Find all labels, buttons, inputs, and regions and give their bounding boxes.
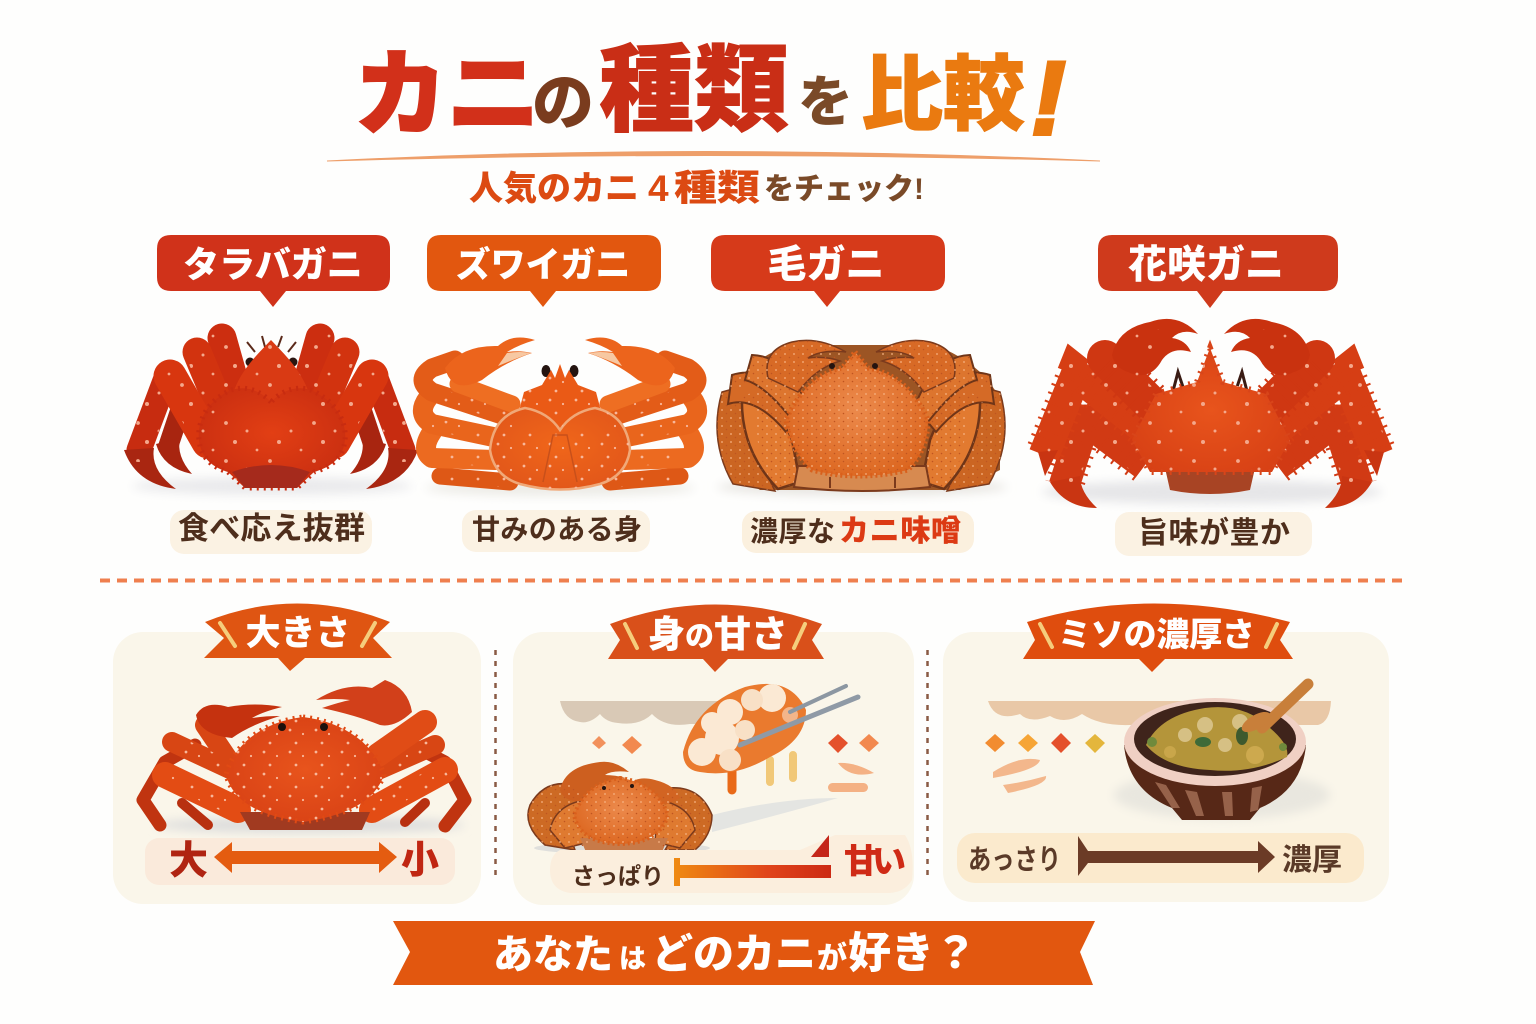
scale: 大 to 小 [145,838,455,885]
banner: ミソの濃厚さ [1023,604,1293,672]
caption: タラバガニ: 食べ応え抜群 [178,511,365,546]
scale: さっぱり to 甘い [550,835,913,893]
tag: 毛ガニ: 毛ガニ [767,244,885,287]
tag: ズワイガニ [427,235,661,307]
title: を [798,71,853,133]
title: ! [1031,41,1066,157]
panel: 身の甘さ [513,604,914,905]
panel: 大きさ [113,604,481,904]
banner: 大きさ: 大きさ [245,614,351,653]
subtitle: 種類 [674,167,760,208]
bottom ribbon [393,921,1095,985]
streaks [993,759,1046,793]
title: 比較 [861,50,1025,141]
crab: ズワイガニ [423,338,697,496]
tag: タラバガニ: タラバガニ [183,244,363,285]
banner: ミソの濃厚さ: ミソの濃厚さ [1058,616,1255,653]
banner: 身の甘さ: 身 [648,614,685,655]
tag: 花咲ガニ [1098,235,1338,308]
bottom ribbon: あなたはどのカニが好き？ [493,930,977,978]
crab: タラバガニ [124,336,418,495]
awning decoration [988,701,1331,725]
banner: 身の甘さ [608,604,824,672]
scale: 大 to 小: 大 [169,840,208,883]
miso bowl [1114,684,1330,820]
tag: ズワイガニ: ズワイガニ [455,245,631,285]
crab: 花咲ガニ [1038,319,1384,508]
tag: タラバガニ [157,235,390,307]
tag: 花咲ガニ: 花咲ガニ [1128,244,1284,287]
crab: 毛ガニ [717,340,1007,496]
diamonds left [592,736,642,754]
crab meat on chopsticks [683,684,858,790]
banner: 身の甘さ: の [685,621,714,653]
diamonds [985,733,1105,753]
subtitle: 人気のカニ [469,170,639,208]
plate shadow [712,798,838,832]
hairy crab illustration [528,762,712,854]
panel: ミソの濃厚さ [943,604,1389,902]
subtitle: をチェック! [764,173,924,206]
title [354,38,1066,157]
scale: あっさり to 濃厚: 濃厚 [1282,844,1342,877]
caption: 毛ガニ: カニ味噌 [839,515,961,548]
title underline [327,152,1100,161]
scale: あっさり to 濃厚: あっさり [968,844,1061,875]
crab illustration: size [143,680,465,833]
caption: ズワイガニ [462,510,650,552]
caption: 毛ガニ: 濃厚な [750,516,835,547]
title: カニ [354,43,540,147]
caption: ズワイガニ: 甘みのある身 [472,514,642,545]
caption: 花咲ガニ [1115,512,1312,556]
caption: 花咲ガニ: 旨味が豊か [1138,516,1290,550]
separators [496,650,928,875]
tag: 毛ガニ [711,235,945,307]
subtitle [469,167,924,209]
diamonds and streaks right [828,734,879,792]
scale: 大 to 小: 小 [401,840,439,882]
banner: 身の甘さ: 甘さ [714,614,788,655]
scale: さっぱり to 甘い: さっぱり [572,863,664,889]
scale: あっさり to 濃厚 [957,833,1364,883]
awning decoration [560,701,725,725]
subtitle: 4 [648,168,669,209]
caption: 毛ガニ [742,511,974,553]
scale: さっぱり to 甘い: 甘い [844,843,906,881]
banner: 大きさ [204,604,392,671]
title: の [532,69,594,138]
title: 種類 [599,38,789,144]
